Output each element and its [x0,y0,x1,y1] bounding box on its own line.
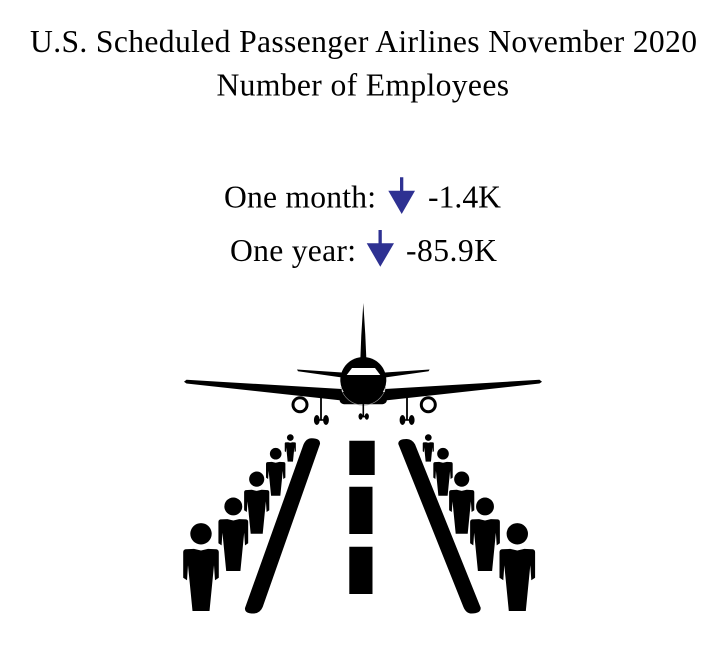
person [244,472,269,534]
fuselage [340,357,386,403]
title [30,24,697,102]
person [500,523,535,611]
title: Number of Employees [216,68,509,102]
one year stat: One year: [230,233,356,268]
one month stat: One month: [224,180,376,214]
person [433,448,453,496]
person [285,434,296,462]
people: right line [423,434,535,611]
person [266,448,285,496]
left runway edge [245,438,320,614]
icon: airplane [184,303,542,425]
one year stat [230,230,497,268]
right runway edge [398,439,481,614]
belly [340,392,387,404]
landing gear [314,396,415,425]
person [183,523,219,611]
horizontal stabilizers [297,370,430,378]
one month stat: -1.4K [428,180,501,214]
cockpit window [347,368,380,375]
icon: down arrow, one year [367,230,394,267]
one month stat [224,177,501,214]
person [423,434,434,462]
person [470,498,500,571]
one year stat: -85.9K [406,233,497,268]
runway center dashes [349,441,375,594]
icon: down arrow, one month [388,177,415,214]
wings [184,380,542,400]
runway [245,438,481,614]
person [218,498,248,571]
person [449,472,474,534]
engines [293,398,307,412]
tail fin [360,303,366,358]
title: U.S. Scheduled Passenger Airlines November 2020 [30,24,697,59]
people: left line [183,434,296,611]
fuselage outline [341,387,386,405]
